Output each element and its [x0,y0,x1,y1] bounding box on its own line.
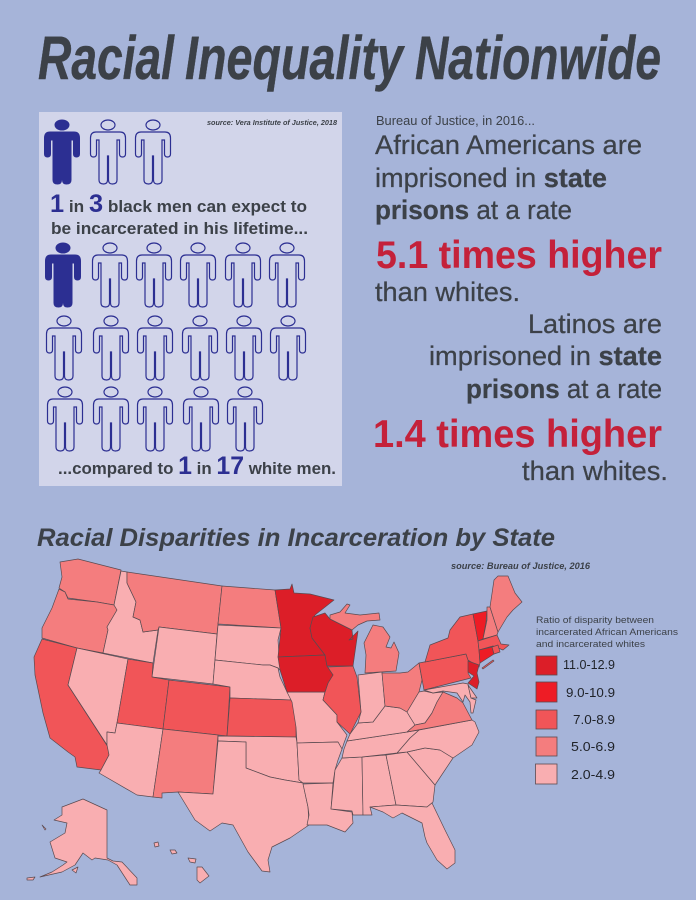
legend title: incarcerated African Americans [536,627,678,638]
map: US states [34,559,522,872]
title [38,24,661,92]
text block: African Americans: Bureau of Justice, in 2016... [376,113,535,128]
source: Vera Institute: source: Vera Institute of Justice, 2018 [207,118,338,127]
text block: African Americans: prisons at a rate [375,195,572,225]
text: 1 in 3 black men: 1 in 3 black men can expect to [50,190,307,218]
panel: 1 in 3 vs 1 in 17 pictogram [39,112,342,486]
text: incarcerated in his lifetime: be incarcerated in his lifetime... [51,219,308,238]
text block: Latinos: prisons at a rate [466,374,662,404]
text block: African Americans: imprisoned in state [375,163,607,193]
source: Bureau of Justice: source: Bureau of Justice, 2016 [451,561,591,572]
legend title: Ratio of disparity between [536,615,654,626]
text block: African Americans: than whites. [375,277,520,307]
text block: Latinos: Latinos are [528,309,662,339]
legend: labels: 7.0-8.9 [573,713,615,727]
title: Inequality [185,24,405,92]
map: Hawaii [154,842,209,883]
pictogram: 1 in 17 [46,243,306,451]
legend: labels: 5.0-6.9 [571,740,615,754]
text block: Latinos: imprisoned in state [429,341,662,371]
legend: labels: 9.0-10.9 [566,686,615,700]
text block: Latinos: 1.4 times higher [373,413,662,456]
text block: Latinos [373,309,668,486]
legend: swatches [536,656,557,784]
pictogram: 1 in 3 [44,120,170,184]
title: Racial [38,24,175,92]
text: compared to 1 in 17: ...compared to 1 in 17 white men. [58,452,336,480]
legend: labels: 11.0-12.9 [563,658,615,672]
map: Alaska [27,799,137,885]
legend: labels: 2.0-4.9 [571,768,615,782]
text block: African Americans: African Americans are [375,130,642,160]
legend [536,615,678,784]
legend title [536,615,678,650]
legend title: and incarcerated whites [536,639,645,650]
text block: African Americans [375,113,662,307]
heading: map: Racial Disparities in Incarceration by State [37,524,555,552]
text block: Latinos: than whites. [522,456,668,486]
legend: labels [563,658,615,782]
text block: African Americans: 5.1 times higher [376,234,662,277]
